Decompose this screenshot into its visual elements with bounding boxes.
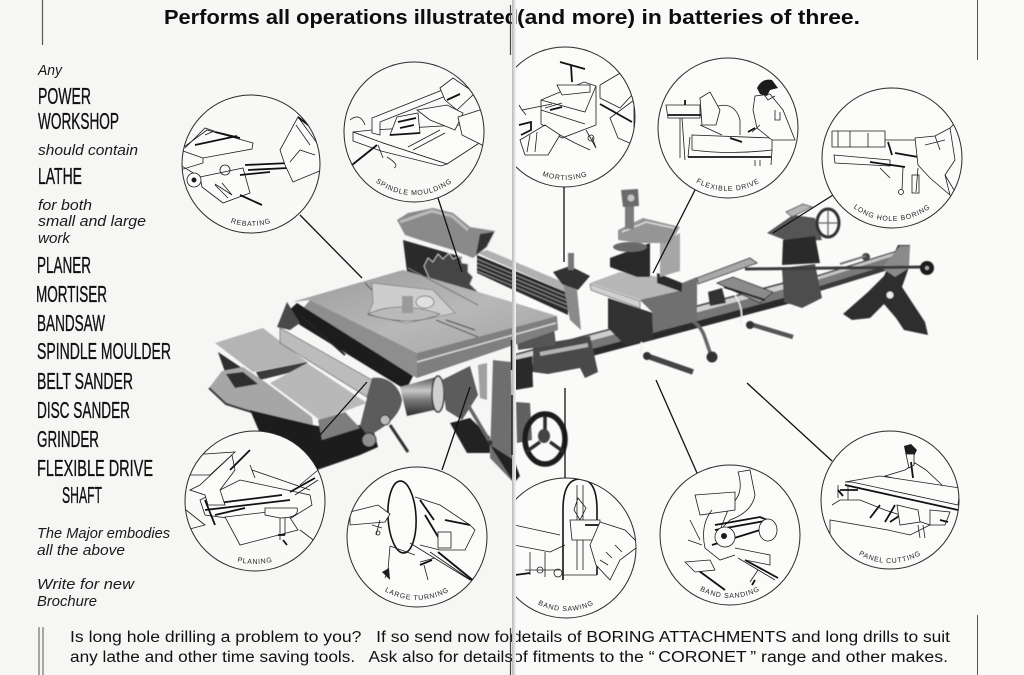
footer text: any lathe and other time saving tools. Ask also for details bbox=[70, 649, 513, 666]
machine photograph: saw bench, planer and lathe bbox=[209, 189, 934, 483]
label: mortising: MORTISING bbox=[542, 171, 586, 180]
left column: power workshop list: BELT SANDER bbox=[37, 368, 133, 394]
planer base bbox=[250, 410, 378, 470]
left column: power workshop list: Brochure bbox=[37, 594, 97, 610]
left column: power workshop list: SPINDLE MOULDER bbox=[37, 338, 171, 364]
mortising carriage and clamp pillar bbox=[590, 189, 697, 345]
leader lines bbox=[300, 187, 833, 478]
label: flexible drive: FLEXIBLE DRIVE bbox=[696, 178, 760, 191]
saw table top bbox=[286, 268, 558, 390]
circle: mortising bbox=[516, 46, 636, 188]
tailstock and hand wheel bbox=[767, 204, 839, 265]
label: band sawing: BAND SAWING bbox=[538, 600, 593, 612]
left column: power workshop list: WORKSHOP bbox=[38, 108, 119, 134]
title bbox=[164, 6, 860, 29]
left column: power workshop list: for both bbox=[38, 198, 92, 214]
planer disc and adjuster bbox=[360, 378, 408, 452]
left column: power workshop list: should contain bbox=[38, 143, 138, 159]
circle: flexible drive bbox=[658, 58, 798, 198]
circle: band sanding bbox=[660, 464, 800, 606]
circle: spindle moulding bbox=[344, 62, 484, 202]
left column: power workshop list: all the above bbox=[37, 543, 125, 559]
saw arbor tube and collars bbox=[400, 366, 478, 420]
lathe bed tube bbox=[514, 254, 900, 390]
circle: rebating bbox=[182, 94, 320, 234]
label: rebating: REBATING bbox=[231, 218, 270, 226]
left column: power workshop list: POWER bbox=[38, 83, 91, 109]
circle: panel cutting bbox=[820, 430, 960, 570]
circle: large turning bbox=[346, 466, 488, 608]
saw blade and riving block bbox=[403, 240, 481, 305]
centre gutter bbox=[510, 0, 516, 675]
left column: power workshop list: DISC SANDER bbox=[37, 397, 130, 423]
left column: power workshop list: MORTISER bbox=[36, 281, 107, 307]
label: planing: PLANING bbox=[238, 557, 272, 564]
circle: long hole boring bbox=[822, 88, 962, 228]
label: long hole boring: LONG HOLE BORING bbox=[854, 204, 930, 221]
footer text bbox=[70, 629, 951, 666]
footer text: details of BORING ATTACHMENTS and long drills to suit bbox=[512, 629, 951, 646]
left column: power workshop list: small and large bbox=[38, 214, 146, 230]
circle: band sawing bbox=[516, 478, 636, 618]
left column: power workshop list: PLANER bbox=[37, 252, 91, 278]
long rod with ball handle bbox=[697, 253, 934, 284]
planer front handle bbox=[209, 367, 314, 431]
left column: power workshop list: Write for new bbox=[37, 577, 136, 593]
levers and crank bbox=[643, 317, 793, 372]
footer text: Is long hole drilling a problem to you? If so send now for bbox=[70, 629, 515, 646]
left column: power workshop list: FLEXIBLE DRIVE bbox=[37, 455, 153, 481]
left column: power workshop list: SHAFT bbox=[62, 482, 102, 508]
left column: power workshop list: The Major embodies bbox=[37, 526, 170, 542]
label: panel cutting: PANEL CUTTING bbox=[859, 550, 920, 564]
blade guard bbox=[397, 208, 495, 258]
left column: power workshop list: LATHE bbox=[38, 163, 82, 189]
label: band sanding: BAND SANDING bbox=[700, 586, 759, 598]
left column: power workshop list bbox=[36, 63, 171, 610]
left column: power workshop list: BANDSAW bbox=[37, 310, 105, 336]
title: (and more) in batteries of three. bbox=[517, 6, 860, 29]
title: Performs all operations illustrated bbox=[164, 6, 518, 29]
left column: power workshop list: work bbox=[38, 231, 71, 247]
compound slide bbox=[708, 277, 773, 306]
central leg and lower block bbox=[450, 360, 532, 483]
planer tables and fence bbox=[215, 302, 372, 420]
footer text: of fitments to the “ CORONET ” range and other makes. bbox=[513, 649, 948, 666]
label: spindle moulding: SPINDLE MOULDING bbox=[376, 178, 451, 195]
hand wheel bbox=[525, 414, 565, 464]
ribbed rip fence bbox=[477, 250, 590, 330]
label: large turning: LARGE TURNING bbox=[385, 587, 448, 600]
lathe end foot bbox=[843, 245, 928, 335]
left column: power workshop list: GRINDER bbox=[37, 426, 99, 452]
left column: power workshop list: Any bbox=[37, 63, 63, 79]
mitre gauge bbox=[368, 283, 455, 323]
circle: planing bbox=[184, 430, 326, 572]
